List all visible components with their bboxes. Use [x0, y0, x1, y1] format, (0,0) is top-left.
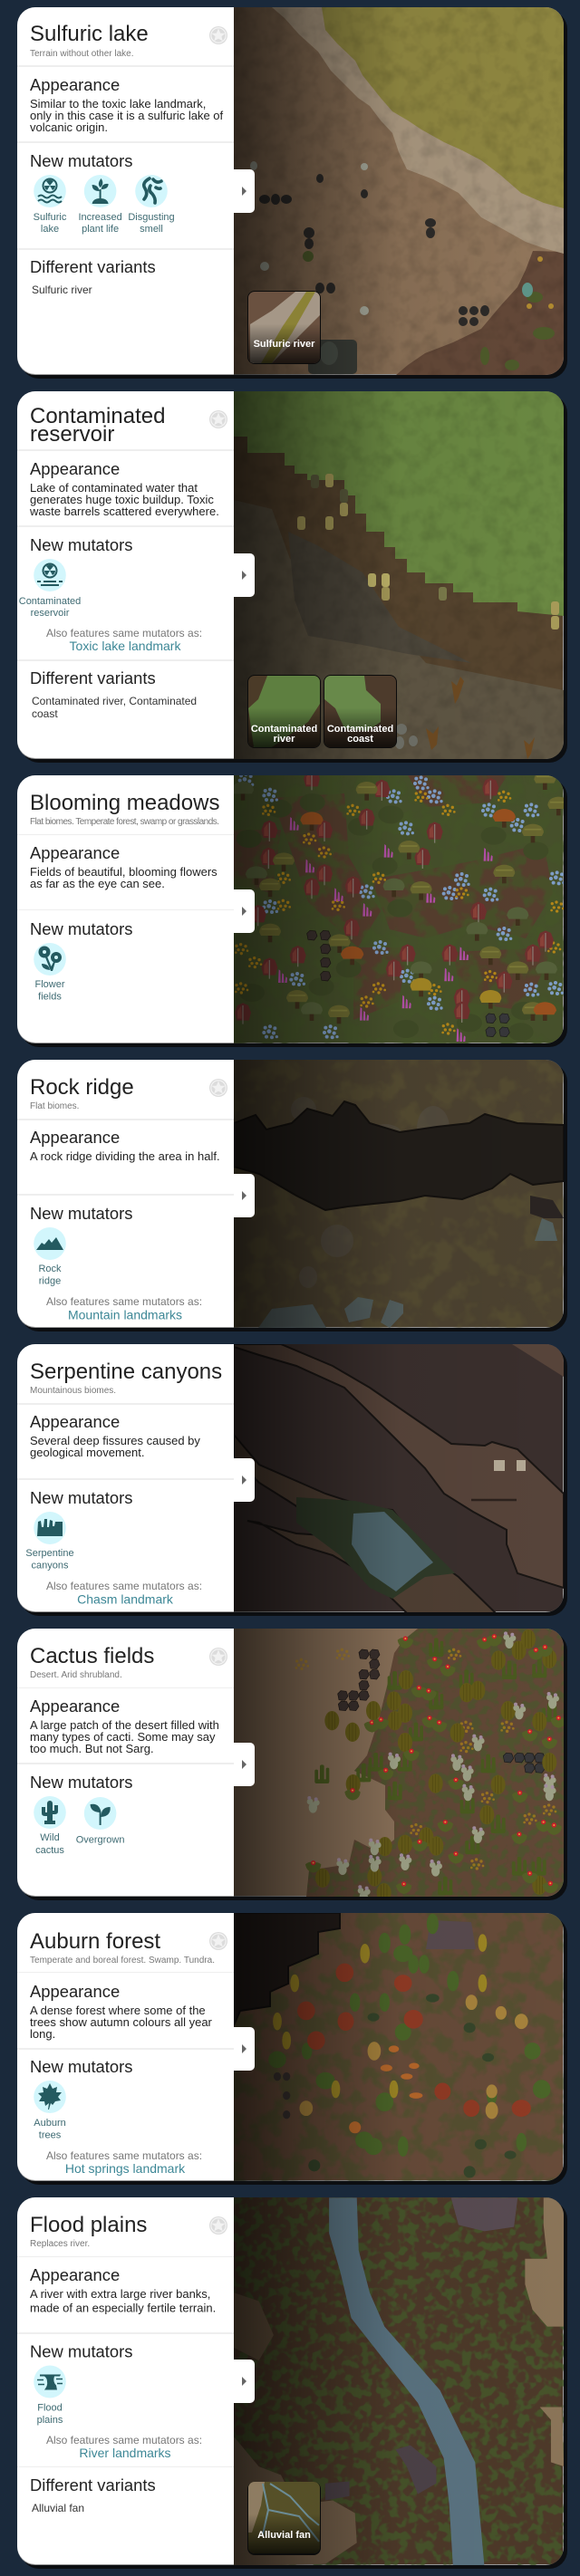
terrain and river — [234, 2197, 564, 2566]
expand tab — [234, 553, 255, 597]
section: new mutators — [30, 1773, 132, 1856]
star icon — [209, 2216, 227, 2235]
title: Blooming meadows — [30, 791, 219, 815]
dead trees and rocks — [426, 677, 535, 759]
thumbnail: contaminated river — [247, 675, 321, 748]
section: appearance: Fields of beautiful, blooming flowers — [30, 865, 218, 879]
section: appearance: Appearance — [30, 459, 120, 478]
related landmark note: Mountain landmarks — [68, 1308, 182, 1322]
map image: auburn forest — [234, 1913, 564, 2181]
section: different variants — [30, 2475, 156, 2514]
icon: flower fields — [34, 943, 66, 976]
section: appearance — [30, 1982, 213, 2041]
related landmark note: Also features same mutators as: — [46, 1580, 202, 1592]
map image: cactus fields — [234, 1629, 566, 1902]
section: new mutators: Increased — [78, 212, 122, 223]
related landmark note — [46, 2149, 202, 2176]
section: new mutators: plains — [37, 2415, 63, 2426]
section: new mutators: Overgrown — [76, 1835, 124, 1846]
section: new mutators: Contaminated — [19, 596, 81, 607]
subtitle: Replaces river. — [30, 2239, 90, 2249]
section: appearance — [30, 1697, 219, 1755]
section: new mutators: lake — [41, 224, 59, 235]
section: appearance: as far as the eye can see. — [30, 877, 165, 890]
title: reservoir — [30, 422, 114, 447]
title: Cactus fields — [30, 1644, 154, 1668]
map image: rock ridge — [234, 1060, 564, 1328]
section: new mutators: Rock — [38, 1264, 62, 1274]
title — [30, 404, 165, 447]
card: Contaminated reservoir — [17, 391, 567, 763]
panel: text column — [17, 1629, 234, 1896]
panel: text column — [17, 1060, 234, 1327]
card: Cactus fields — [17, 1629, 567, 1902]
section: new mutators: Sulfuric — [34, 212, 67, 223]
section: appearance: volcanic origin. — [30, 120, 108, 134]
section: new mutators: New mutators — [30, 1204, 132, 1223]
section: appearance: Appearance — [30, 2265, 120, 2284]
section: new mutators: New mutators — [30, 535, 132, 554]
thumbnail: alluvial fan: Alluvial fan — [257, 2530, 311, 2541]
section: appearance: A river with extra large river banks, — [30, 2287, 210, 2301]
star icon — [209, 1932, 227, 1950]
section: different variants: Contaminated river, Contaminated — [32, 695, 197, 707]
related landmark note — [46, 627, 202, 653]
panel: text column — [17, 7, 234, 374]
thumbnail: sulfuric river — [247, 291, 321, 364]
card: Auburn forest — [17, 1913, 567, 2185]
section: new mutators — [30, 919, 132, 1002]
section: different variants: coast — [32, 707, 58, 720]
subtitle: Desert. Arid shrubland. — [30, 1670, 122, 1680]
card: Serpentine canyons — [17, 1344, 567, 1616]
section: different variants — [30, 668, 197, 720]
section: appearance: many types of cacti. Some may say — [30, 1730, 216, 1744]
subtitle: Flat biomes. — [30, 1101, 79, 1111]
section: appearance: Lake of contaminated water that — [30, 481, 198, 495]
section: new mutators: New mutators — [30, 151, 132, 170]
panel: text column — [17, 2197, 234, 2564]
star icon — [209, 1648, 227, 1666]
related landmark note — [46, 1580, 202, 1607]
panel: text column — [17, 391, 234, 758]
subtitle: Temperate and boreal forest. Swamp. Tundra. — [30, 1956, 215, 1966]
title: Rock ridge — [30, 1075, 134, 1100]
thumbnail: alluvial fan — [247, 2482, 321, 2555]
section: different variants: Different variants — [30, 2475, 156, 2494]
icon: overgrown — [84, 1797, 116, 1830]
icon: disgusting smell — [135, 175, 168, 207]
section: appearance: too much. But not Sarg. — [30, 1742, 154, 1755]
star icon — [209, 26, 227, 44]
related landmark note — [46, 2434, 202, 2460]
section: appearance: made of an especially fertile terrain. — [30, 2301, 216, 2315]
icon: auburn trees — [34, 2081, 66, 2113]
icon: contaminated reservoir — [34, 559, 66, 591]
section: appearance — [30, 843, 218, 890]
expand tab — [234, 889, 255, 933]
plants and flowers — [232, 769, 569, 1042]
thumbnail: sulfuric river: Sulfuric river — [254, 339, 315, 350]
section: new mutators: New mutators — [30, 919, 132, 938]
subtitle: Terrain without other lake. — [30, 49, 134, 59]
thumbnail: contaminated river: Contaminated — [251, 724, 317, 735]
section: appearance — [30, 1412, 200, 1459]
section: different variants: Different variants — [30, 668, 156, 687]
section: new mutators — [25, 1488, 132, 1571]
related landmark note: Also features same mutators as: — [46, 2434, 202, 2446]
section: appearance: geological movement. — [30, 1446, 144, 1459]
section: new mutators — [30, 2342, 132, 2426]
star icon — [209, 1079, 227, 1097]
section: different variants: Different variants — [30, 257, 156, 276]
card: Rock ridge — [17, 1060, 567, 1331]
related landmark note: Chasm landmark — [77, 1592, 174, 1607]
map image: contaminated reservoir — [234, 391, 564, 759]
section: appearance — [30, 1128, 220, 1163]
vehicle wreck — [308, 340, 357, 374]
section: different variants — [30, 257, 156, 296]
related landmark note: River landmarks — [79, 2446, 171, 2460]
section: appearance: A dense forest where some of the — [30, 2004, 206, 2017]
title: Contaminated — [30, 404, 165, 428]
title: Serpentine canyons — [30, 1360, 222, 1384]
title: Sulfuric lake — [30, 22, 149, 46]
section: different variants: Sulfuric river — [32, 284, 92, 296]
expand tab — [234, 2360, 255, 2403]
section: new mutators: Wild — [40, 1832, 60, 1843]
related landmark note: Hot springs landmark — [65, 2161, 186, 2176]
section: appearance: Appearance — [30, 1128, 120, 1147]
related landmark note: Toxic lake landmark — [70, 639, 181, 653]
icon: serpentine canyons — [34, 1512, 66, 1544]
section: new mutators: Flood — [37, 2402, 63, 2413]
section: appearance: Appearance — [30, 1697, 120, 1716]
section: new mutators: canyons — [32, 1560, 69, 1571]
card: Blooming meadows — [17, 769, 569, 1047]
panel: text column — [17, 775, 234, 1043]
section: new mutators — [30, 151, 175, 235]
section: new mutators: ridge — [39, 1275, 61, 1286]
icon: wild cactus — [34, 1796, 66, 1829]
expand tab — [234, 1458, 255, 1502]
panel: text column — [17, 1913, 234, 2180]
section: new mutators: reservoir — [31, 608, 70, 619]
subtitle: Flat biomes. Temperate forest, swamp or grasslands. — [30, 817, 219, 827]
panel: text column — [17, 1344, 234, 1611]
section: new mutators: trees — [39, 2130, 62, 2141]
expand tab — [234, 1743, 255, 1786]
expand tab — [234, 2027, 255, 2071]
section: appearance: Appearance — [30, 1982, 120, 2001]
section: new mutators — [30, 1204, 132, 1286]
title: Auburn forest — [30, 1929, 160, 1954]
related landmark note: Also features same mutators as: — [46, 627, 202, 639]
icon: flood plains — [34, 2366, 66, 2398]
dark ridge — [234, 1101, 564, 1210]
section: appearance: only in this case it is a sulfuric lake of — [30, 109, 224, 122]
section: new mutators: New mutators — [30, 2342, 132, 2360]
section: new mutators: cactus — [35, 1845, 64, 1856]
section: new mutators: fields — [38, 991, 62, 1002]
thumbnail: contaminated coast: Contaminated — [327, 724, 393, 735]
card: Flood plains — [17, 2197, 567, 2569]
star icon — [209, 410, 227, 428]
section: new mutators: Flower — [34, 979, 65, 990]
map image: blooming meadows — [232, 769, 569, 1043]
section: new mutators: plant life — [82, 224, 119, 235]
icon: sulfuric lake — [34, 175, 66, 207]
section: new mutators: Auburn — [34, 2118, 66, 2129]
trees — [270, 1916, 549, 2177]
map image: serpentine canyons — [234, 1344, 564, 1613]
section: new mutators: smell — [140, 224, 163, 235]
section: appearance: Appearance — [30, 75, 120, 94]
related landmark note: Also features same mutators as: — [46, 2149, 202, 2162]
section: appearance — [30, 75, 224, 134]
section: appearance: Similar to the toxic lake landmark, — [30, 97, 206, 111]
section: appearance: A rock ridge dividing the area in half. — [30, 1149, 220, 1163]
section: appearance — [29, 459, 219, 518]
section: appearance: A large patch of the desert filled with — [30, 1718, 219, 1732]
section: new mutators: New mutators — [30, 2057, 132, 2076]
icon: increased plant life — [84, 175, 116, 207]
mountain corner — [234, 1913, 340, 2025]
section: new mutators: Serpentine — [25, 1548, 74, 1559]
map image: sulfuric lake — [234, 7, 564, 375]
section: new mutators: New mutators — [30, 1773, 132, 1792]
icon: rock ridge — [34, 1227, 66, 1260]
map image: flood plains — [234, 2197, 564, 2566]
section: appearance — [30, 2265, 216, 2315]
section: different variants: Alluvial fan — [32, 2502, 84, 2514]
thumbnail: contaminated river: river — [274, 734, 295, 745]
section: appearance: waste barrels scattered everywhere. — [29, 505, 219, 518]
section: new mutators — [30, 2057, 132, 2141]
section: new mutators — [19, 535, 132, 619]
section: appearance: Appearance — [30, 1412, 120, 1431]
section: new mutators: Disgusting — [128, 212, 175, 223]
title: Flood plains — [30, 2213, 147, 2237]
thumbnail: contaminated coast: coast — [347, 734, 373, 745]
thumbnail: contaminated coast — [324, 675, 397, 748]
section: appearance: Appearance — [30, 843, 120, 862]
expand tab — [234, 169, 255, 213]
rocks — [259, 174, 489, 326]
section: appearance: generates huge toxic buildup. Toxic — [30, 493, 214, 506]
cacti and rocks — [295, 1629, 566, 1902]
section: new mutators: New mutators — [30, 1488, 132, 1507]
toxic barrels — [297, 474, 559, 630]
section: appearance: long. — [30, 2027, 55, 2041]
card: Sulfuric lake — [17, 7, 567, 379]
related landmark note: Also features same mutators as: — [46, 1295, 202, 1308]
related landmark note — [46, 1295, 202, 1322]
canyon strips — [234, 1344, 564, 1588]
expand tab — [234, 1174, 255, 1217]
subtitle: Mountainous biomes. — [30, 1386, 116, 1396]
section: appearance: trees show autumn colours all year — [30, 2015, 213, 2029]
section: appearance: Several deep fissures caused by — [30, 1434, 200, 1447]
